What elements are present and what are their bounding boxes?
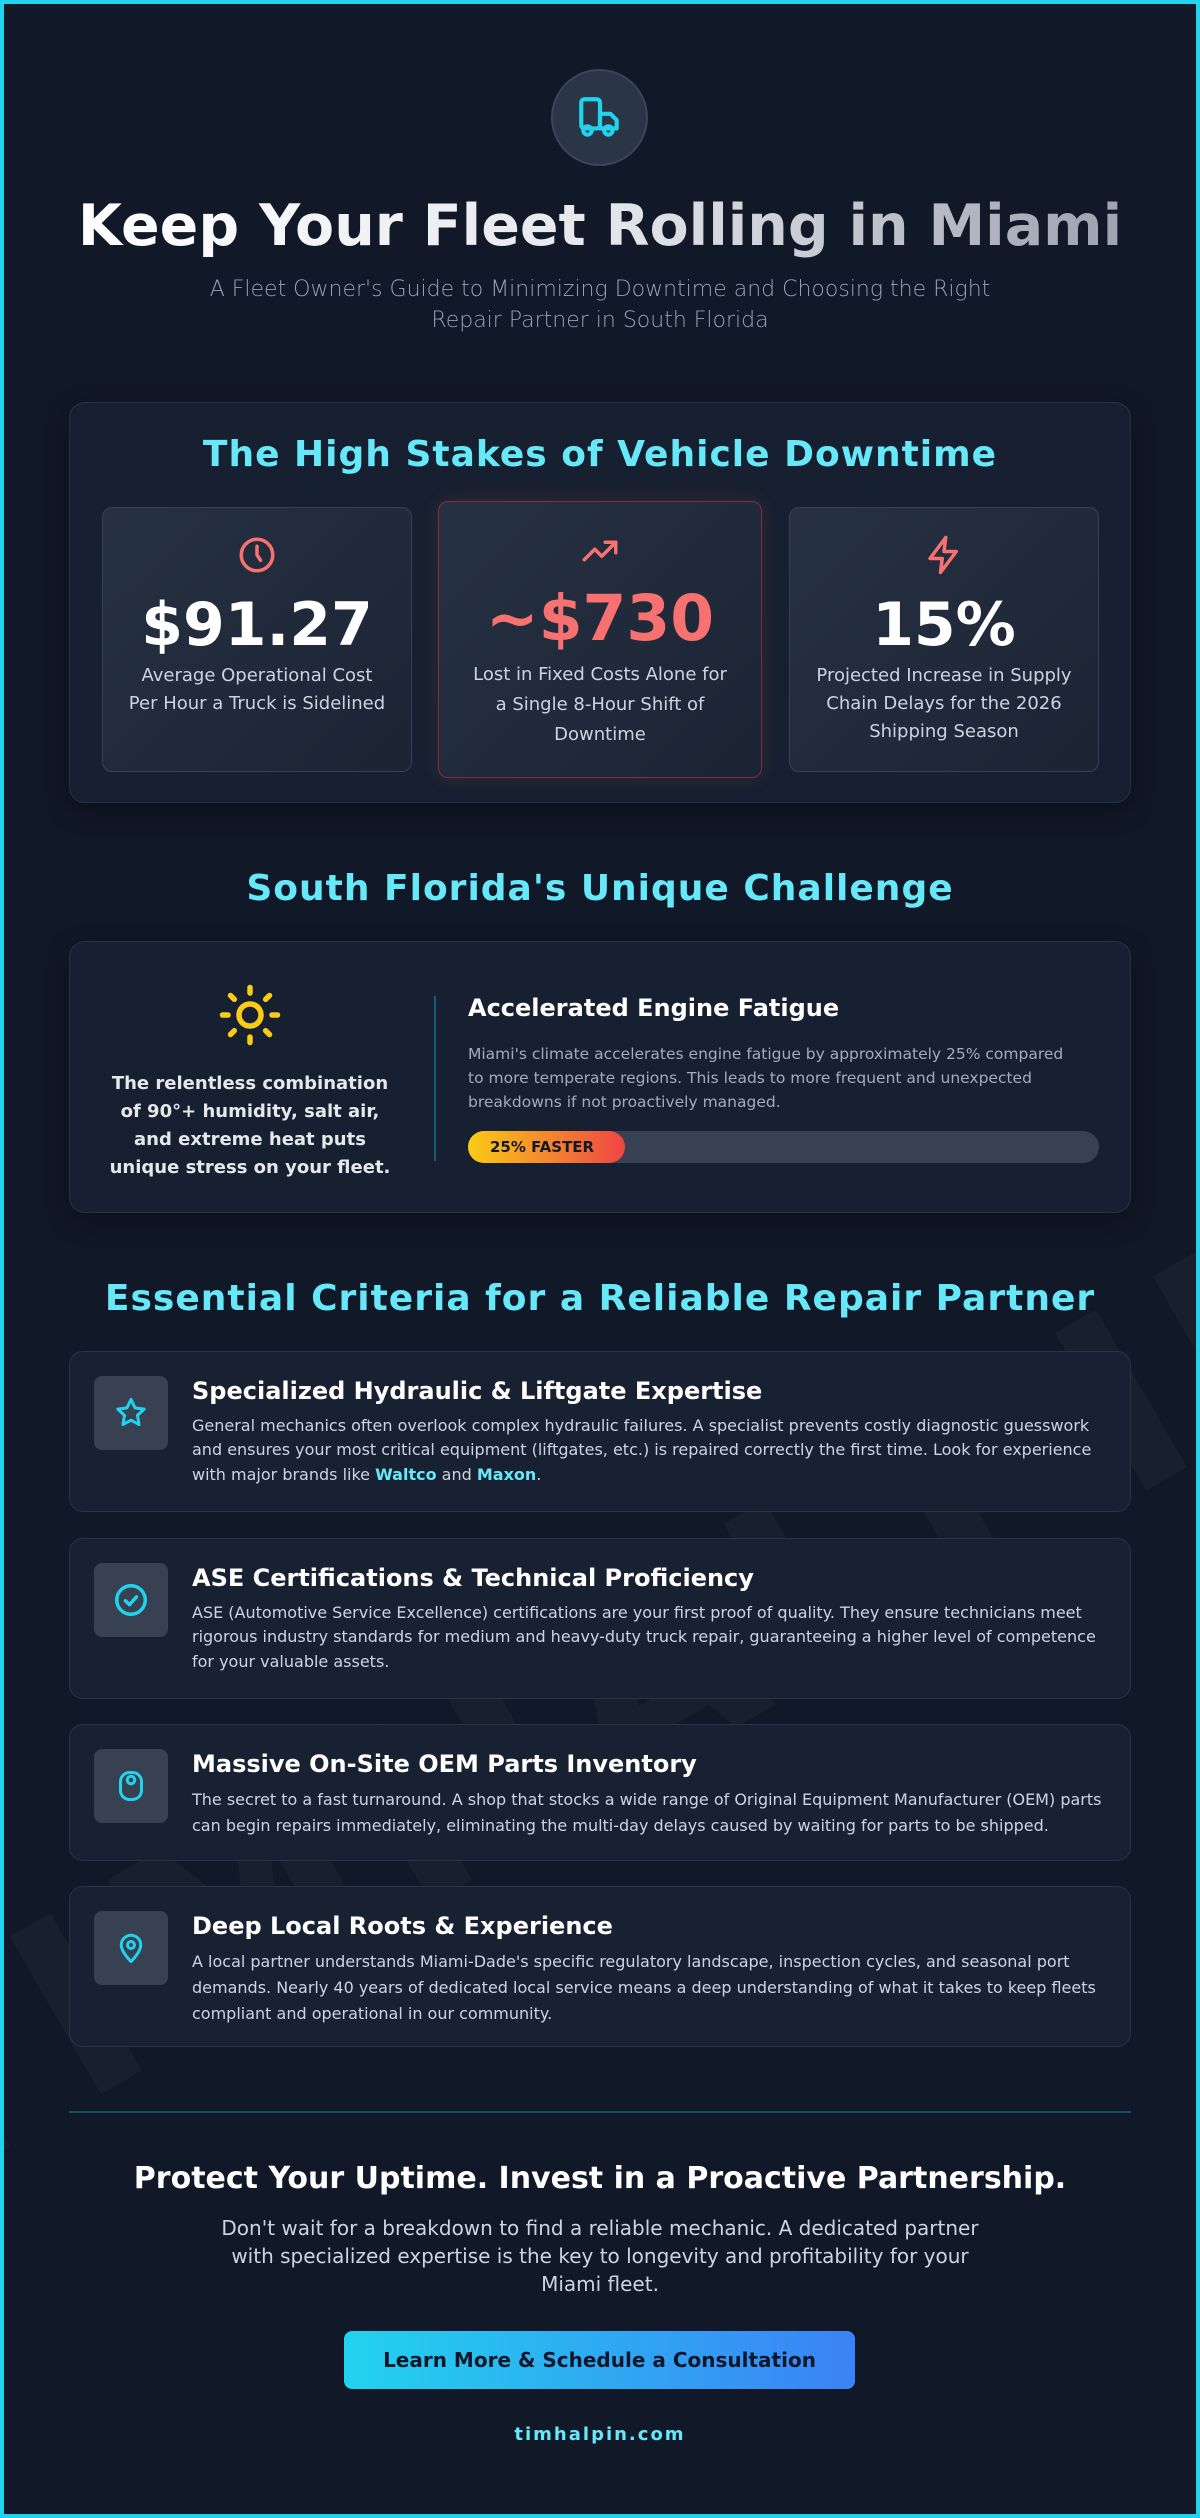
panel: downtime stakes (69, 402, 1131, 803)
icon: pin (94, 1911, 168, 1985)
stat card 1: Average Operational Cost (142, 665, 372, 686)
icon: bolt (928, 536, 958, 574)
progress bar: 25% FASTER (490, 1138, 594, 1156)
criteria card 1: Specialized Hydraulic & Liftgate Expertise (192, 1377, 762, 1405)
button (344, 2331, 855, 2389)
criteria card 2 (69, 1538, 1131, 1699)
stat card 3 (789, 507, 1099, 772)
cta heading: Protect Your Uptime. Invest in a Proactive Partnership. (134, 2161, 1066, 2196)
criteria card 4: Deep Local Roots & Experience (192, 1912, 613, 1940)
stat card 3: Projected Increase in Supply Chain Delays for the 2026 Shipping Season (816, 665, 1072, 742)
stat card 1: $91.27 (141, 590, 373, 660)
stat card 2 (438, 501, 762, 778)
criteria card 2: ASE Certifications & Technical Proficiency (192, 1564, 754, 1592)
icon: parts (94, 1749, 168, 1823)
stat card 3: 15% (872, 590, 1016, 660)
criteria card 3: The secret to a fast turnaround. A shop that stocks a wide range of Original Equipment Manufacturer (OEM) parts can begin repairs immediately, eliminating the multi-day delays caused by waiting for parts to be shipped. (192, 1790, 1101, 1835)
stat card 1: Per Hour a Truck is Sidelined (129, 693, 385, 714)
criteria card 2: ASE (Automotive Service Excellence) certifications are your first proof of quality. They ensure technicians meet rigorous industry standards for medium and heavy-duty truck repair, guaranteeing a higher level of competence for your valuable assets. (192, 1603, 1096, 1671)
icon: trend up (582, 540, 618, 562)
heading: engine fatigue: Accelerated Engine Fatigue (468, 994, 839, 1022)
heading: criteria: Essential Criteria for a Reliable Repair Partner (105, 1278, 1095, 1319)
footer: timhalpin.com (514, 2424, 686, 2445)
stat card 2: ~$730 (486, 582, 714, 655)
text: climate stress: The relentless combination of 90°+ humidity, salt air, and extreme heat puts unique stress on your fleet. (110, 1073, 390, 1178)
text: engine fatigue: Miami's climate accelerates engine fatigue by approximately 25% compared to more temperate regions. This leads to more frequent and unexpected breakdowns if not proactively managed. (468, 1045, 1063, 1111)
criteria card 4: A local partner understands Miami-Dade's specific regulatory landscape, inspection cycles, and seasonal port demands. Nearly 40 years of dedicated local service means a deep understanding of what it takes to keep fleets compliant and operational in our community. (192, 1952, 1096, 2023)
criteria card 1 (69, 1351, 1131, 1512)
panel: unique challenge (69, 941, 1131, 1213)
icon: clock (240, 538, 274, 572)
criteria card 3 (69, 1724, 1131, 1861)
cta text: Don't wait for a breakdown to find a reliable mechanic. A dedicated partner with specialized expertise is the key to longevity and profitability for your Miami fleet. (221, 2216, 979, 2296)
icon: check (94, 1563, 168, 1637)
subtitle: A Fleet Owner's Guide to Minimizing Downtime and Choosing the Right Repair Partner in South Florida (210, 277, 990, 333)
stat card 1 (102, 507, 412, 772)
progress bar (468, 1131, 1099, 1163)
criteria card 4 (69, 1886, 1131, 2047)
button: Learn More & Schedule a Consultation (383, 2348, 816, 2372)
heading: high stakes: The High Stakes of Vehicle Downtime (203, 434, 997, 475)
title: Keep Your Fleet Rolling in Miami (78, 193, 1122, 259)
criteria card 1: General mechanics often overlook complex hydraulic failures. A specialist prevents costly diagnostic guesswork and ensures your most critical equipment (liftgates, etc.) is repaired correctly the first time. Look for experience with major brands like Waltco and Maxon. (192, 1416, 1091, 1484)
icon: truck (551, 69, 648, 166)
criteria card 3: Massive On-Site OEM Parts Inventory (192, 1750, 697, 1778)
icon: star (94, 1376, 168, 1450)
stat card 2: Lost in Fixed Costs Alone for a Single 8-Hour Shift of Downtime (473, 664, 727, 745)
heading: south florida: South Florida's Unique Challenge (246, 868, 954, 909)
icon: sun (220, 984, 280, 1046)
